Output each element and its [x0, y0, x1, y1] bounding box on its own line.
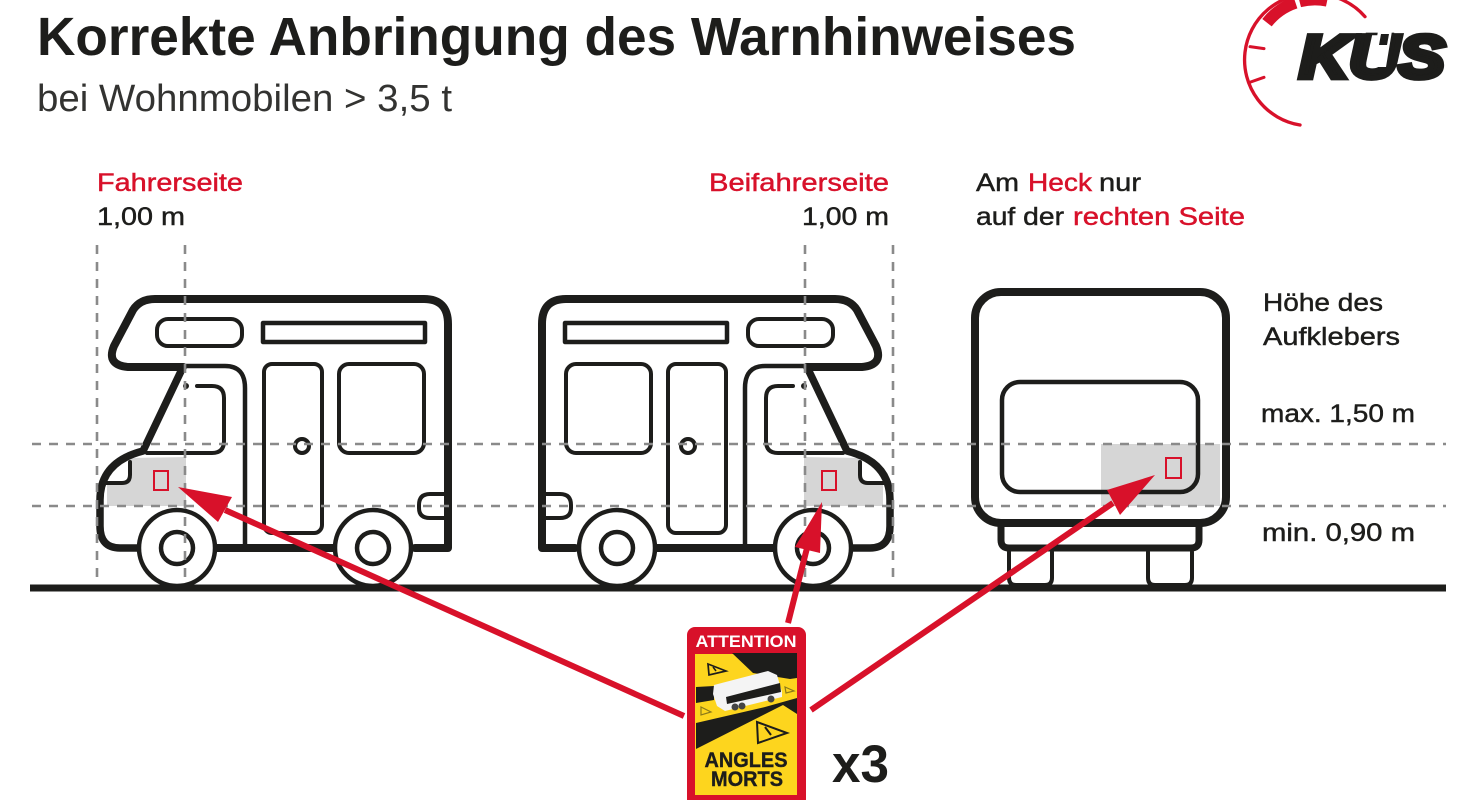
- sticker artwork: bus and warning triangles: [696, 653, 797, 749]
- camper: passenger side: [542, 299, 890, 586]
- heading: Heck: rechten Seite: [1073, 203, 1245, 231]
- height labels: Höhe des: [1263, 289, 1383, 317]
- sticker: Attention Angles Morts: MORTS: [711, 767, 783, 791]
- height labels: Aufklebers: [1263, 323, 1400, 351]
- arrow: to rear: [811, 475, 1155, 710]
- heading: Fahrerseite: Fahrerseite: [97, 169, 243, 197]
- heading: Fahrerseite: 1,00 m: [97, 203, 185, 231]
- heading: Heck: nur: [1099, 169, 1141, 197]
- subtitle: bei Wohnmobilen > 3,5 t: [37, 78, 452, 120]
- logo: KÜS: [1245, 0, 1460, 125]
- height labels: [1261, 289, 1415, 547]
- logo: KÜS: KÜS: [1299, 23, 1445, 90]
- camper: rear view: [975, 292, 1226, 585]
- heading: Beifahrerseite: Beifahrerseite: [709, 169, 889, 197]
- heading: Beifahrerseite: 1,00 m: [802, 203, 889, 231]
- height labels: max. 1,50 m: [1261, 400, 1415, 428]
- heading: Beifahrerseite: [709, 169, 889, 231]
- heading: Heck: [976, 169, 1245, 231]
- heading: Heck: auf der: [976, 203, 1064, 231]
- arrow: to passenger side: [788, 502, 822, 623]
- quantity: x3: x3: [832, 735, 889, 794]
- title: Korrekte Anbringung des Warnhinweises: [37, 7, 1076, 67]
- camper: driver side: [100, 299, 448, 586]
- heading: Heck: Heck: [1028, 169, 1093, 197]
- sticker: Attention Angles Morts: [687, 627, 806, 800]
- ground line: [30, 584, 1446, 592]
- heading: Fahrerseite: [97, 169, 243, 231]
- sticker: Attention Angles Morts: ANGLES: [704, 748, 788, 772]
- arrow: to driver side: [178, 487, 684, 716]
- sticker: Attention Angles Morts: ATTENTION: [696, 633, 796, 651]
- height labels: min. 0,90 m: [1262, 519, 1415, 547]
- heading: Heck: Am: [976, 169, 1019, 197]
